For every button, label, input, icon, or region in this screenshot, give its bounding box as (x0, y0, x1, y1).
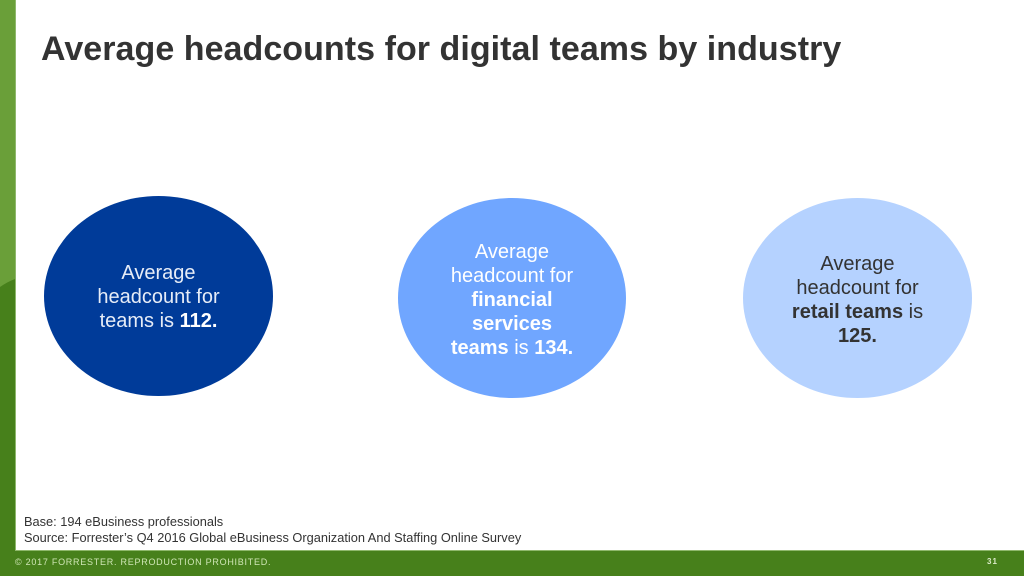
oval: average headcount (44, 196, 273, 396)
source note: Base: 194 eBusiness professionals (24, 514, 223, 529)
oval: retail: retail teams is (792, 300, 923, 322)
oval: financial services: teams is 134. (451, 336, 573, 358)
copyright: © 2017 FORRESTER. REPRODUCTION PROHIBITED. (15, 557, 271, 567)
source note (24, 514, 522, 545)
title: Average headcounts for digital teams by industry (41, 30, 841, 68)
oval: retail: headcount for (796, 276, 919, 298)
oval: financial services: headcount for (451, 264, 573, 286)
oval: average headcount: headcount for (97, 286, 220, 308)
left green sidebar (0, 0, 16, 551)
oval: retail (743, 198, 972, 398)
oval: financial services (398, 198, 626, 398)
oval: retail: Average (820, 252, 895, 274)
oval: average headcount: Average (121, 262, 196, 284)
oval: average headcount: teams is 112. (100, 310, 217, 332)
oval: retail: 125. (838, 324, 877, 346)
footer bar (0, 551, 1024, 576)
source note: Source: Forrester’s Q4 2016 Global eBusiness Organization And Staffing Online Survey (24, 530, 521, 545)
oval: financial services: financial (471, 288, 553, 310)
oval: financial services: Average (475, 240, 549, 262)
oval: financial services: services (472, 312, 552, 334)
page number: 31 (987, 557, 998, 566)
footer top rule (15, 550, 1024, 551)
